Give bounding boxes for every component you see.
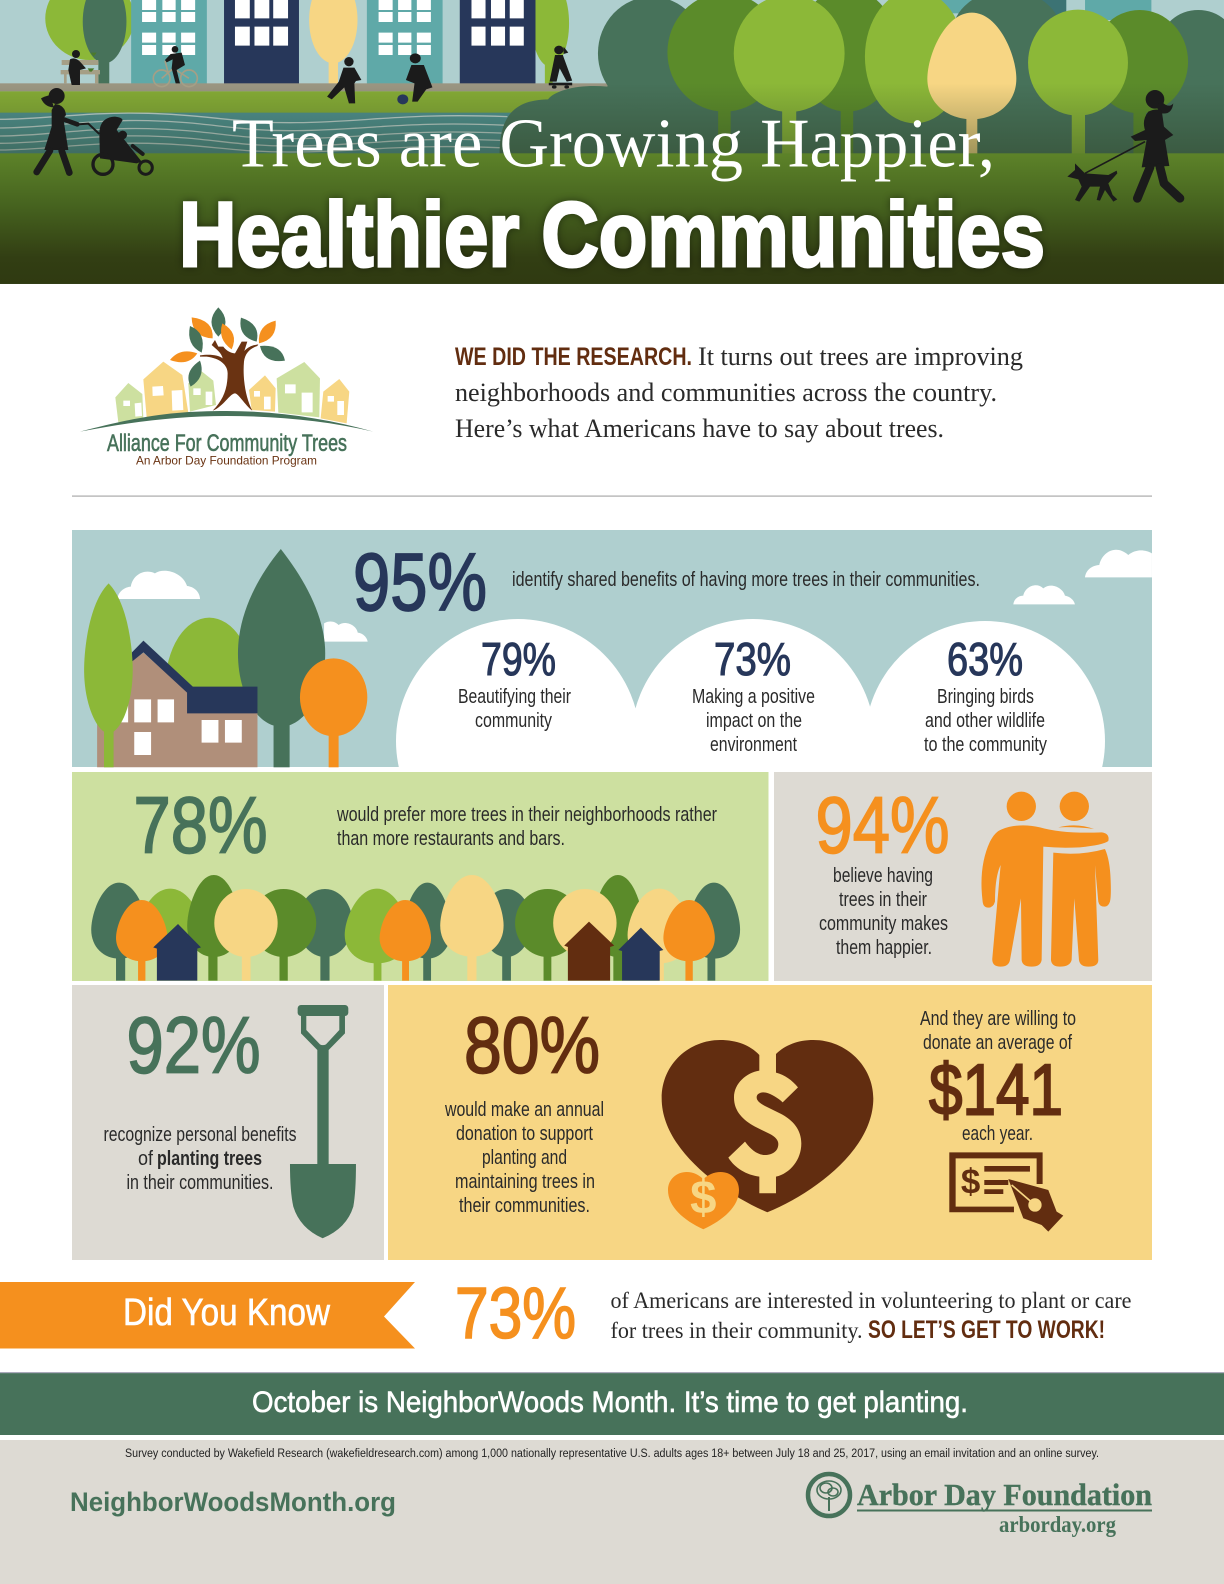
94 percent caption: community makes [819,913,948,935]
92 percent caption: recognize personal benefits [104,1124,296,1146]
78 percent caption [336,804,717,850]
stat: 79 percent: Beautifying their [458,686,571,708]
cloud [117,571,200,599]
80 percent caption: their communities. [459,1195,590,1217]
logo subtitle: An Arbor Day Foundation Program [136,454,317,468]
80 percent caption: maintaining trees in [455,1171,595,1193]
92 percent caption [104,1124,296,1194]
icon: check and pen [949,1152,1063,1232]
logo tree [200,340,258,411]
panel: 80 percent donation [388,985,1152,1260]
people playing on the path [327,46,572,104]
stat: 73 percent: impact on the [706,710,802,732]
80 percent caption [444,1099,604,1217]
icon: hearts with dollar signs [662,1040,873,1229]
illustration: house and trees [84,549,368,767]
92 percent caption: planting trees [157,1148,262,1170]
stat: 63 percent [924,633,1047,756]
94 percent figure: 94% [816,780,950,870]
intro text block: It turns out trees are improving [698,342,1023,371]
volunteering text block [610,1288,1132,1344]
logo: Alliance For Community Trees [80,307,373,468]
80 percent caption: would make an annual [444,1099,604,1121]
95 percent caption: identify shared benefits of having more trees in their communities. [512,569,980,591]
right tree group [667,0,1188,154]
donation amount text: each year. [962,1123,1033,1145]
stat: 63 percent: and other wildlife [925,710,1045,732]
icon: check and pen: $ [961,1162,980,1201]
stat: 63 percent: to the community [924,734,1047,756]
river waves [0,113,507,152]
banner: NeighborWoods Month [0,1372,1224,1435]
icon: person on bench and cyclist [61,46,197,87]
intro text block [455,342,1023,443]
94 percent caption: them happier. [836,937,932,959]
78 percent caption: than more restaurants and bars. [337,828,565,850]
intro text block: neighborhoods and communities across the country. [455,378,997,407]
92 percent caption: in their communities. [126,1172,274,1194]
donation amount text [920,1008,1076,1145]
panel: 78 percent prefer trees [72,772,768,981]
volunteering text block: SO LET’S GET TO WORK! [868,1316,1105,1344]
panel: 94 percent happier [774,772,1152,981]
logo: Arbor Day Foundation: arborday.org [999,1512,1116,1537]
stat: 73 percent [692,633,815,756]
volunteering text block: for trees in their community. [610,1318,862,1344]
header illustration banner [0,0,1224,286]
92 percent figure: 92% [126,1000,260,1090]
78 percent caption: would prefer more trees in their neighborhoods rather [336,804,717,826]
stat: 63 percent: Bringing birds [937,686,1034,708]
title line two: Healthier Communities [179,184,1045,286]
volunteering text block: of Americans are interested in volunteering to plant or care [610,1288,1132,1314]
80 percent figure: 80% [464,1000,600,1090]
73 percent figure: 73% [455,1274,576,1354]
website link: NeighborWoodsMonth.org [70,1487,396,1517]
92 percent caption: of [138,1148,153,1170]
stat: 73 percent: environment [710,734,797,756]
stat: 79 percent [458,633,571,732]
icon: woman walking dog [1067,90,1180,202]
94 percent caption: believe having [833,865,933,887]
logo houses [115,362,349,423]
footer panel [0,1440,1224,1584]
80 percent caption: planting and [482,1147,567,1169]
logo name: Alliance For Community Trees [107,430,347,457]
stat: 63 percent: 63% [947,633,1023,685]
logo: Arbor Day Foundation: Arbor Day Foundation [857,1477,1152,1512]
panel: 92 percent planting trees [72,985,384,1260]
stat: 79 percent: community [475,710,552,732]
row of trees and houses [91,875,740,981]
94 percent caption: trees in their [839,889,927,911]
banner: did you know [0,1282,415,1348]
icon: hearts with dollar signs: $ [690,1171,716,1224]
logo: Arbor Day Foundation [808,1474,1152,1537]
80 percent caption: donation to support [456,1123,593,1145]
icon: shovel [290,1005,356,1238]
donation amount text: donate an average of [923,1032,1072,1054]
stat: 73 percent: Making a positive [692,686,815,708]
intro text block: WE DID THE RESEARCH. [455,343,692,371]
panel: 95 percent shared benefits [72,530,1152,768]
banner: did you know: Did You Know [123,1292,330,1334]
clouds right [1013,550,1152,604]
donation amount text: $141 [929,1050,1063,1130]
stat: 79 percent: 79% [481,633,556,685]
94 percent caption [819,865,948,959]
icon: woman with stroller [37,88,152,174]
icon: two people embracing [981,792,1111,967]
intro text block: Here’s what Americans have to say about trees. [455,414,944,443]
survey note: Survey conducted by Wakefield Research (wakefieldresearch.com) among 1,000 nationally representative U.S. adults ages 18+ between July 18 and 25, 2017, using an email invitation and an online survey. [125,1448,1099,1460]
buildings [131,0,535,84]
donation amount text: And they are willing to [920,1008,1076,1030]
stat: 73 percent: 73% [714,633,791,685]
title line one: Trees are Growing Happier, [232,106,995,182]
78 percent figure: 78% [134,780,268,870]
95 percent figure: 95% [353,537,487,628]
white semicircles [396,619,1105,767]
banner: NeighborWoods Month: October is NeighborWoods Month. It’s time to get planting. [252,1386,968,1419]
logo leaves [170,307,285,387]
